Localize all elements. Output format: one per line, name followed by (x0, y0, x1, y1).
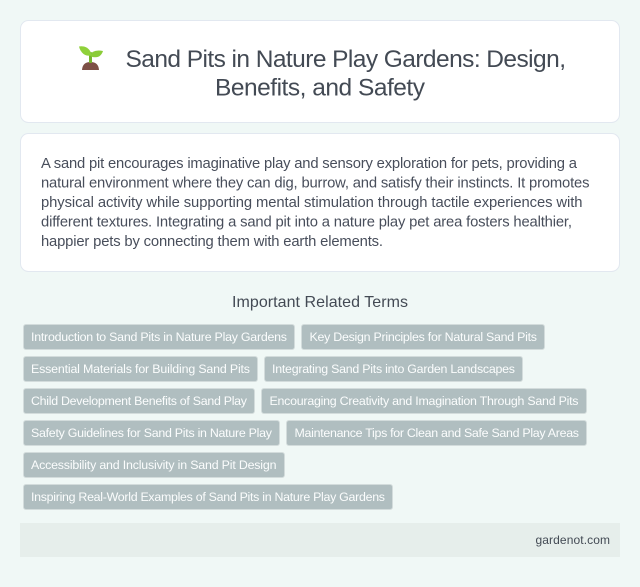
tag: introduction (24, 324, 294, 350)
tag: design principles: Key Design Principles for Natural Sand Pits (310, 330, 537, 344)
tag: introduction: Introduction to Sand Pits in Nature Play Gardens (31, 330, 287, 344)
tag: landscapes (264, 356, 522, 382)
panel: title card (20, 20, 620, 122)
tag: landscapes: Integrating Sand Pits into Garden Landscapes (272, 362, 515, 376)
tag: child development: Child Development Benefits of Sand Play (31, 394, 248, 408)
text block: description: physical activity while supporting mental stimulation through tactile experiences with (41, 195, 582, 211)
title: Sand Pits in Nature Play Gardens: Design, (126, 46, 566, 73)
icon: seedling (79, 46, 103, 70)
text block: description (41, 156, 590, 250)
tag: design principles (302, 324, 544, 350)
panel: description (20, 134, 620, 272)
tag: creativity (262, 388, 586, 414)
footer (20, 523, 620, 557)
tag: materials: Essential Materials for Building Sand Pits (31, 362, 250, 376)
tag: maintenance (286, 420, 586, 446)
heading: related terms: Important Related Terms (232, 294, 408, 311)
text block: description: different textures. Integrating a sand pit into a nature play pet area fosters healthier, (41, 214, 572, 230)
footer: gardenot.com (536, 533, 610, 547)
tag: examples: Inspiring Real-World Examples of Sand Pits in Nature Play Gardens (31, 490, 385, 504)
title (126, 46, 566, 102)
tag: safety (24, 420, 280, 446)
text block: description: A sand pit encourages imaginative play and sensory exploration for pets, providing a (41, 156, 578, 172)
tag: accessibility (24, 452, 284, 478)
title: Benefits, and Safety (215, 74, 426, 102)
tag: maintenance: Maintenance Tips for Clean and Safe Sand Play Areas (294, 426, 579, 440)
tag: safety: Safety Guidelines for Sand Pits in Nature Play (31, 426, 273, 440)
tag: examples (24, 484, 392, 510)
text block: description: natural environment where they can dig, burrow, and satisfy their instincts. It promotes (41, 176, 590, 192)
tag list (24, 324, 586, 510)
tag: materials (24, 356, 258, 382)
text block: description: happier pets by connecting them with earth elements. (41, 234, 383, 250)
tag: child development (24, 388, 254, 414)
tag: accessibility: Accessibility and Inclusivity in Sand Pit Design (31, 458, 277, 472)
tag: creativity: Encouraging Creativity and Imagination Through Sand Pits (270, 394, 578, 408)
